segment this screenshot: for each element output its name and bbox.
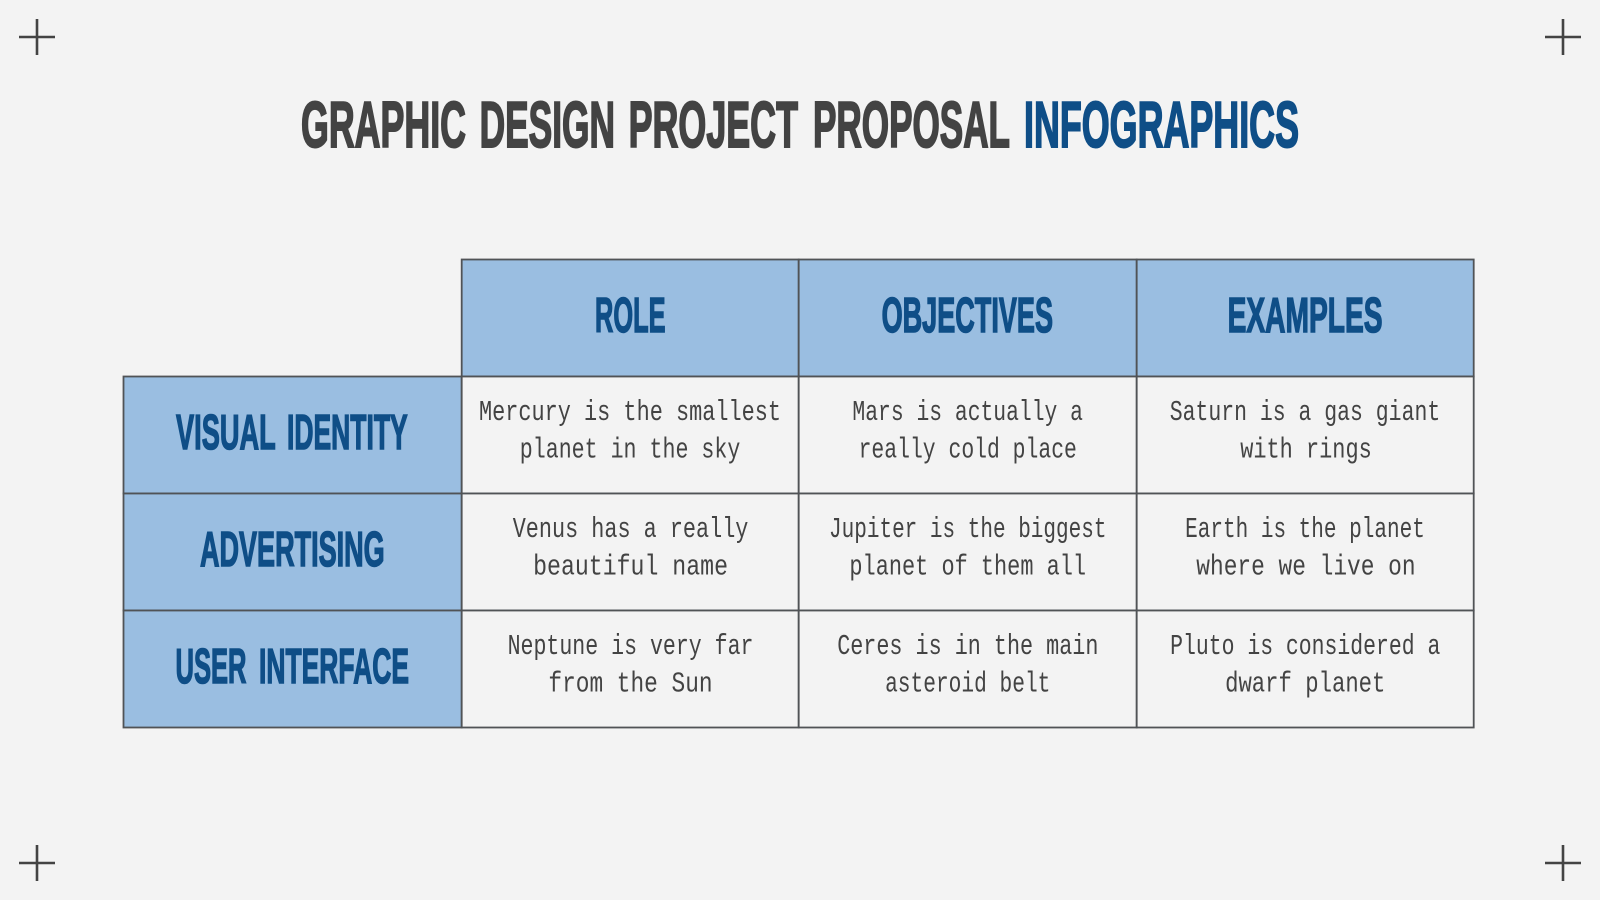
cell: user interface role: from the Sun [548,668,713,701]
cell: visual identity objectives: really cold place [859,434,1077,467]
title: PROJECT [629,88,798,161]
cell: visual identity role: Mercury is the smallest [479,396,781,429]
cell: advertising examples: Earth is the planet [1185,513,1425,546]
cell: user interface examples: Pluto is considered a [1170,630,1440,663]
icon: corner cross bottom right [1545,845,1581,881]
cell: advertising examples [1137,494,1474,610]
column header: objectives: OBJECTIVES [882,289,1053,343]
cell: visual identity objectives: Mars is actually a [852,396,1083,429]
cell: advertising role: beautiful name [533,551,728,584]
cell: user interface objectives: Ceres is in the main [837,630,1098,663]
title: PROPOSAL [813,88,1010,161]
row header: advertising: ADVERTISING [200,523,385,577]
cell: advertising role: Venus has a really [513,513,748,546]
row header: visual identity [124,376,462,494]
cell: visual identity role: planet in the sky [520,434,740,467]
row header: user interface: INTERFACE [259,640,409,694]
column header: examples [1137,260,1474,376]
icon: corner cross top right [1545,19,1581,55]
column header: role [462,260,799,376]
column header: examples: EXAMPLES [1228,289,1383,343]
row header: user interface [124,610,462,728]
cell: visual identity examples [1137,376,1474,494]
cell: visual identity examples: with rings [1240,434,1372,467]
row header: visual identity: IDENTITY [287,406,408,460]
cell: user interface role: Neptune is very far [508,630,754,663]
cell: advertising examples: where we live on [1196,551,1416,584]
title: GRAPHIC [301,88,466,161]
cell: advertising objectives: planet of them all [849,551,1086,584]
cell: user interface examples [1137,610,1474,728]
row header: visual identity: VISUAL [176,406,276,460]
cell: visual identity role [462,376,799,494]
cell: advertising role [462,494,799,610]
title: INFOGRAPHICS [1024,88,1299,161]
title: DESIGN [480,88,615,161]
cell: user interface objectives: asteroid belt [885,668,1050,701]
row header: advertising [124,494,462,610]
row header: user interface: USER [176,640,246,694]
icon: corner cross bottom left [19,845,55,881]
cell: advertising objectives: Jupiter is the biggest [829,513,1106,546]
cell: user interface objectives [799,610,1137,728]
cell: advertising objectives [799,494,1137,610]
table [124,260,1474,728]
cell: visual identity objectives [799,376,1137,494]
cell: user interface examples: dwarf planet [1225,668,1385,701]
column header: objectives [799,260,1137,376]
icon: corner cross top left [19,19,55,55]
cell: visual identity examples: Saturn is a gas giant [1170,396,1440,429]
column header: role: ROLE [595,289,666,343]
cell: user interface role [462,610,799,728]
